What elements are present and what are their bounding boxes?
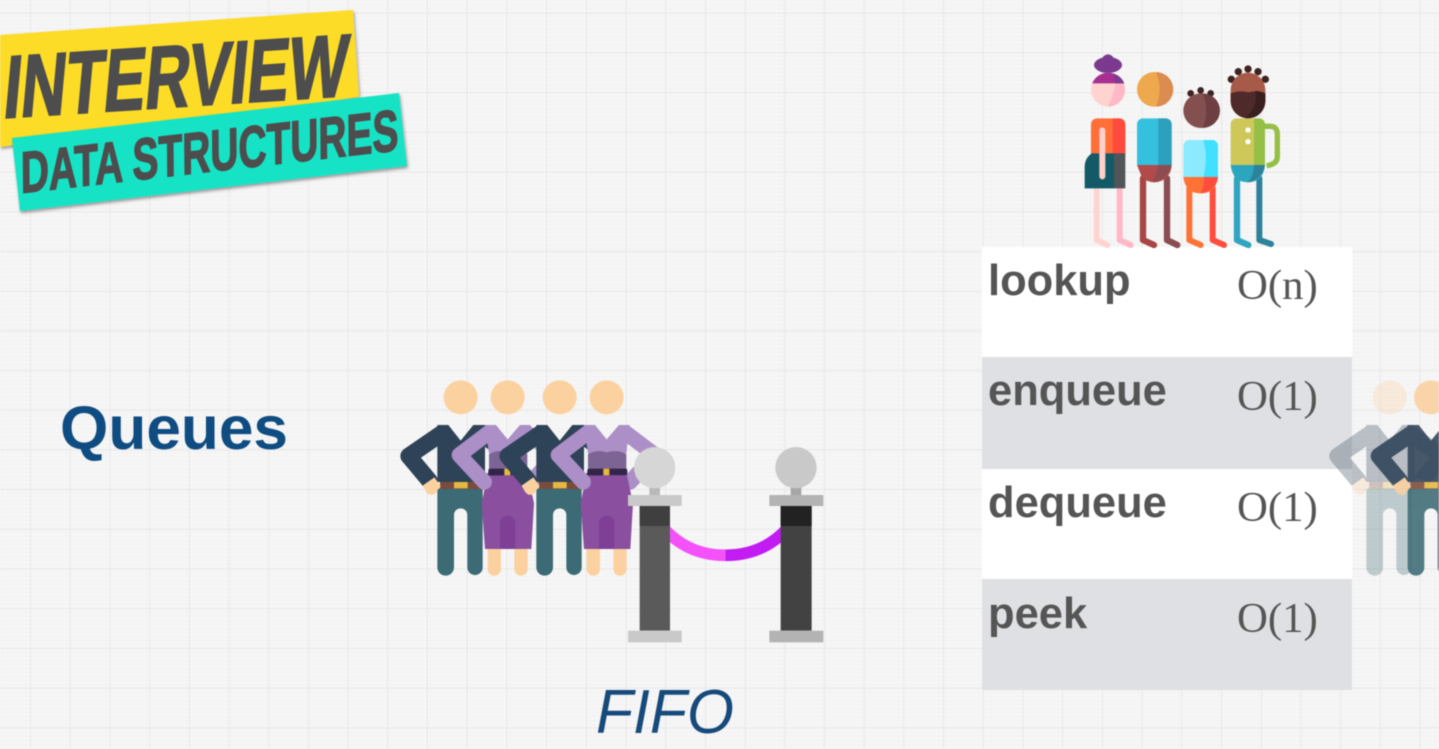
subtitle banner: data structures xyxy=(12,93,407,211)
row: enqueue: O(1) xyxy=(1237,373,1318,420)
person: woman 1 xyxy=(459,380,556,576)
person: child xyxy=(1183,87,1224,245)
row: peek xyxy=(982,579,1352,690)
row: enqueue: enqueue xyxy=(988,367,1167,415)
label: FIFO: FIFO xyxy=(596,678,734,747)
row: lookup: O(n) xyxy=(1237,262,1318,309)
row: lookup: lookup xyxy=(988,257,1131,305)
illustration: people fading in at right edge xyxy=(1338,380,1439,576)
person: woman with bun xyxy=(1085,54,1131,245)
table: queue complexity xyxy=(982,247,1352,690)
person: man with orange head xyxy=(1137,72,1177,245)
subtitle banner: data structures: DATA STRUCTURES xyxy=(21,98,399,206)
illustration: four standing people xyxy=(1085,54,1277,245)
row: lookup xyxy=(988,257,1318,309)
person: man entering xyxy=(1379,380,1439,576)
rope xyxy=(662,526,789,555)
person: man 1 xyxy=(409,380,513,576)
illustration: people queueing behind rope barrier xyxy=(409,380,823,642)
person: man 2 xyxy=(508,380,612,576)
title banner: interview xyxy=(0,10,359,147)
barrier post right xyxy=(769,447,823,642)
row: enqueue xyxy=(982,357,1352,469)
title banner: interview: INTERVIEW xyxy=(0,16,353,137)
person: man with mug-handle arm xyxy=(1228,65,1277,245)
row: peek: O(1) xyxy=(1237,595,1318,642)
person: woman 2 xyxy=(558,380,655,576)
row: dequeue: O(1) xyxy=(1237,484,1318,531)
row: peek: peek xyxy=(988,590,1088,638)
row: dequeue: dequeue xyxy=(988,479,1167,527)
heading: Queues: Queues xyxy=(60,394,288,462)
barrier post left xyxy=(628,447,682,642)
row: dequeue xyxy=(988,479,1318,531)
person: faded man xyxy=(1338,380,1439,576)
